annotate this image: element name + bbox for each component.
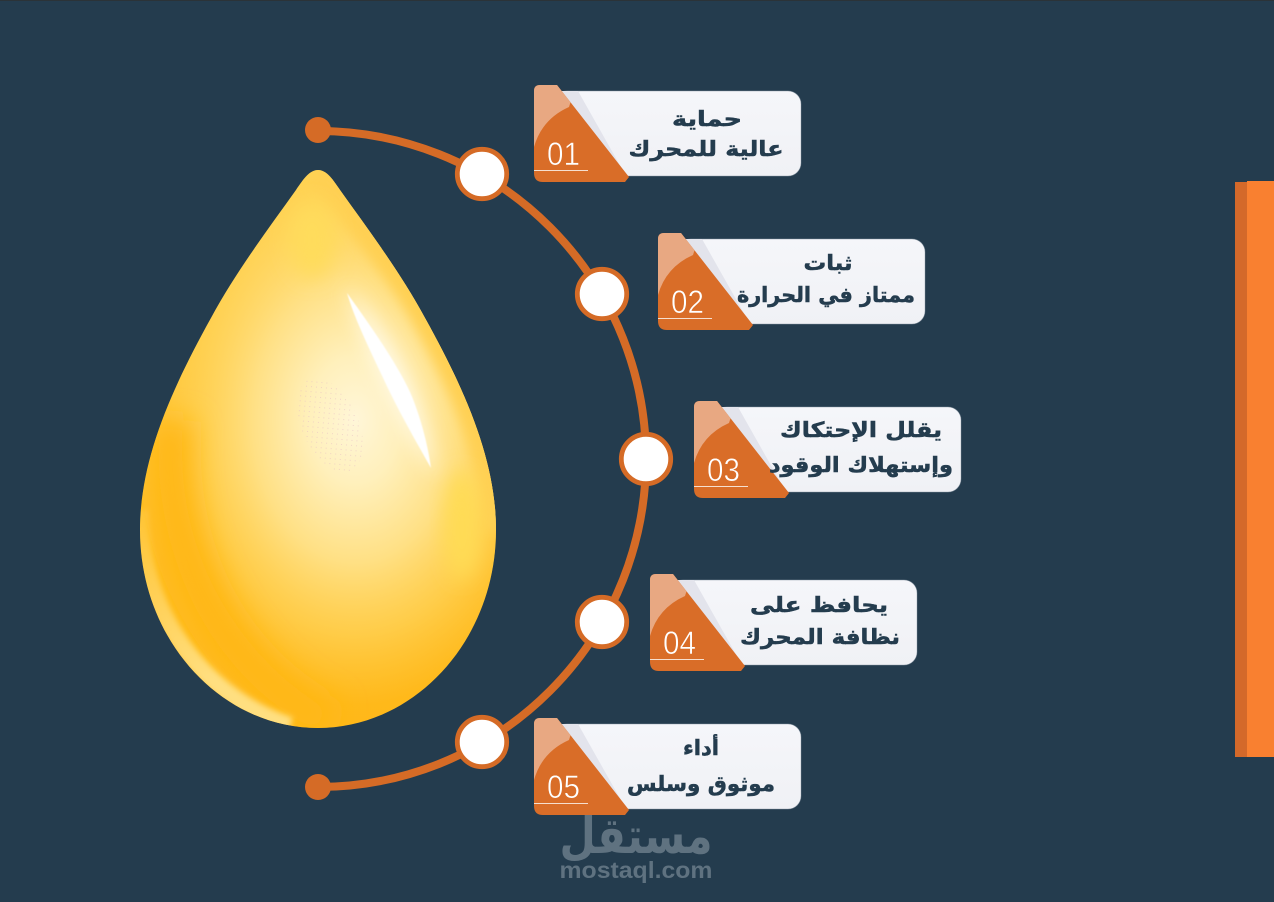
card 05: موثوق وسلس xyxy=(627,772,775,796)
card 03: وإستهلاك الوقود xyxy=(769,453,953,477)
card 05: 05 xyxy=(547,769,580,805)
node 3 xyxy=(621,434,671,484)
stippled dots xyxy=(298,380,362,471)
card 04: نظافة المحرك xyxy=(740,625,900,649)
card 03 xyxy=(694,401,961,498)
card 01 xyxy=(534,85,801,182)
card 03: 03 xyxy=(707,452,740,488)
specular glow xyxy=(345,285,436,480)
card 05 xyxy=(534,718,801,815)
card 01: عالية للمحرك xyxy=(628,137,784,161)
oil drop xyxy=(140,170,496,728)
card 03: يقلل الإحتكاك xyxy=(780,418,942,442)
specular highlight xyxy=(347,293,431,468)
watermark: مستقل xyxy=(560,807,712,865)
yellow spot at right xyxy=(444,470,480,580)
card 01: 01 xyxy=(547,136,580,172)
node 2 xyxy=(577,269,627,319)
card 02: ممتاز في الحرارة xyxy=(737,283,915,307)
watermark: mostaql.com xyxy=(560,857,712,883)
card 04: يحافظ على xyxy=(750,593,888,617)
card 02: ثبات xyxy=(804,251,852,275)
deep orange left band xyxy=(170,420,330,725)
central glow xyxy=(164,170,496,689)
node 1 xyxy=(457,149,507,199)
card 05: أداء xyxy=(683,733,719,760)
card 01: حماية xyxy=(672,107,742,131)
card 04 xyxy=(650,574,917,671)
orange side bar xyxy=(1235,181,1274,757)
upper and right rim xyxy=(318,170,496,530)
yellow spot at top xyxy=(295,235,337,282)
arc end dot top xyxy=(305,117,331,143)
arc xyxy=(318,131,646,787)
card 02 xyxy=(658,233,925,330)
lower-left rim light xyxy=(139,510,290,726)
card 04: 04 xyxy=(663,625,696,661)
node 4 xyxy=(577,597,627,647)
node 5 xyxy=(457,717,507,767)
watermark xyxy=(560,807,712,883)
arc end dot bottom xyxy=(305,774,331,800)
card 02: 02 xyxy=(671,284,704,320)
